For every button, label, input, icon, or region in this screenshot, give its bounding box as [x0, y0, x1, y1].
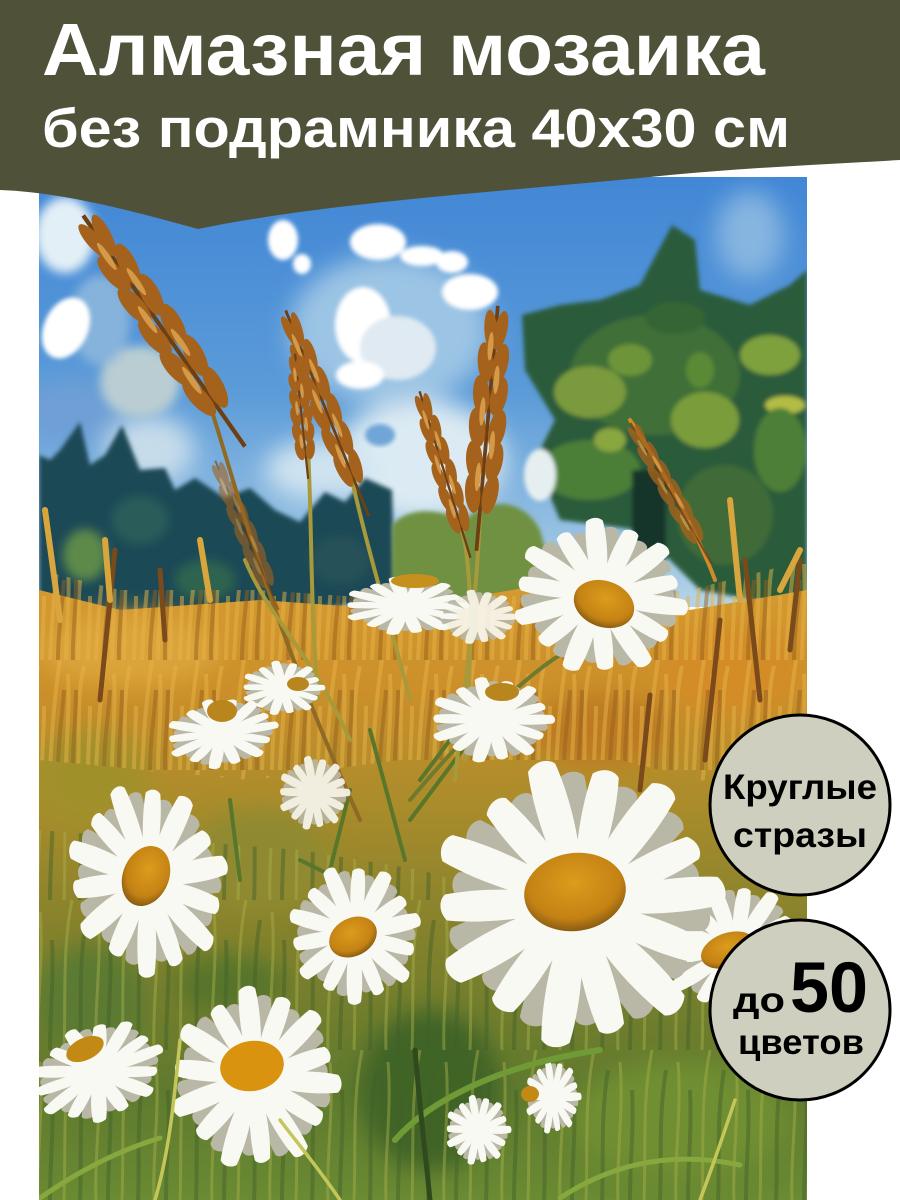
dry grass texture [39, 560, 807, 790]
golden field and green foreground [39, 585, 807, 1200]
large daisy [440, 760, 726, 1048]
badge: up to 50 colours [710, 920, 890, 1100]
daisy, left [69, 786, 228, 978]
clouds [20, 191, 784, 520]
wheat ear, center [414, 391, 472, 558]
green grass texture [39, 830, 807, 1200]
wheat ear, center left [280, 310, 370, 517]
wheat ear, short center left [288, 354, 315, 479]
badge: up to 50 colours: цветов [738, 1023, 864, 1062]
subtitle: без подрамника 40х30 см [42, 97, 790, 159]
large tree, right [522, 225, 807, 610]
daisy, right behind large one [673, 888, 790, 1002]
daisy, bottom edge left [39, 1022, 164, 1123]
distant daisy, behind dome [438, 589, 519, 645]
daisy, center small [290, 868, 421, 1005]
stems [210, 405, 715, 820]
daisy, small mid left [242, 660, 325, 716]
middle bushes [392, 504, 560, 600]
badge: up to 50 colours: 50 [790, 949, 868, 1028]
wheat ear, tall left [78, 214, 247, 448]
foreground grass blades [40, 1040, 740, 1200]
distant tree line, left [39, 422, 395, 615]
badge: round rhinestones [710, 715, 890, 895]
distant daisy, dome [346, 574, 469, 636]
painted colour patches in the field [30, 615, 800, 1180]
badge: round rhinestones: стразы [733, 816, 867, 855]
header banner [0, 0, 900, 229]
daisy, bottom center [446, 1059, 582, 1166]
painting: daisies and wheat in a summer meadow [19, 177, 815, 1200]
sky [39, 177, 807, 607]
daisy, bottom left [174, 986, 342, 1166]
wheat ear, orange right [628, 422, 712, 564]
title: Алмазная мозаика [42, 8, 766, 91]
daisy, shaded [279, 755, 350, 830]
wheat ear, pale lower left [212, 460, 280, 610]
daisy, mid left [168, 700, 279, 769]
daisy, mid center [432, 676, 555, 763]
tree highlights, left [63, 496, 370, 600]
grass clumps in the mid-ground [45, 500, 800, 880]
daisy, upper right [514, 518, 688, 671]
badge: round rhinestones: Круглые [723, 768, 877, 807]
wheat ear, tall center [464, 306, 510, 551]
badge: up to 50 colours: до [733, 981, 785, 1020]
